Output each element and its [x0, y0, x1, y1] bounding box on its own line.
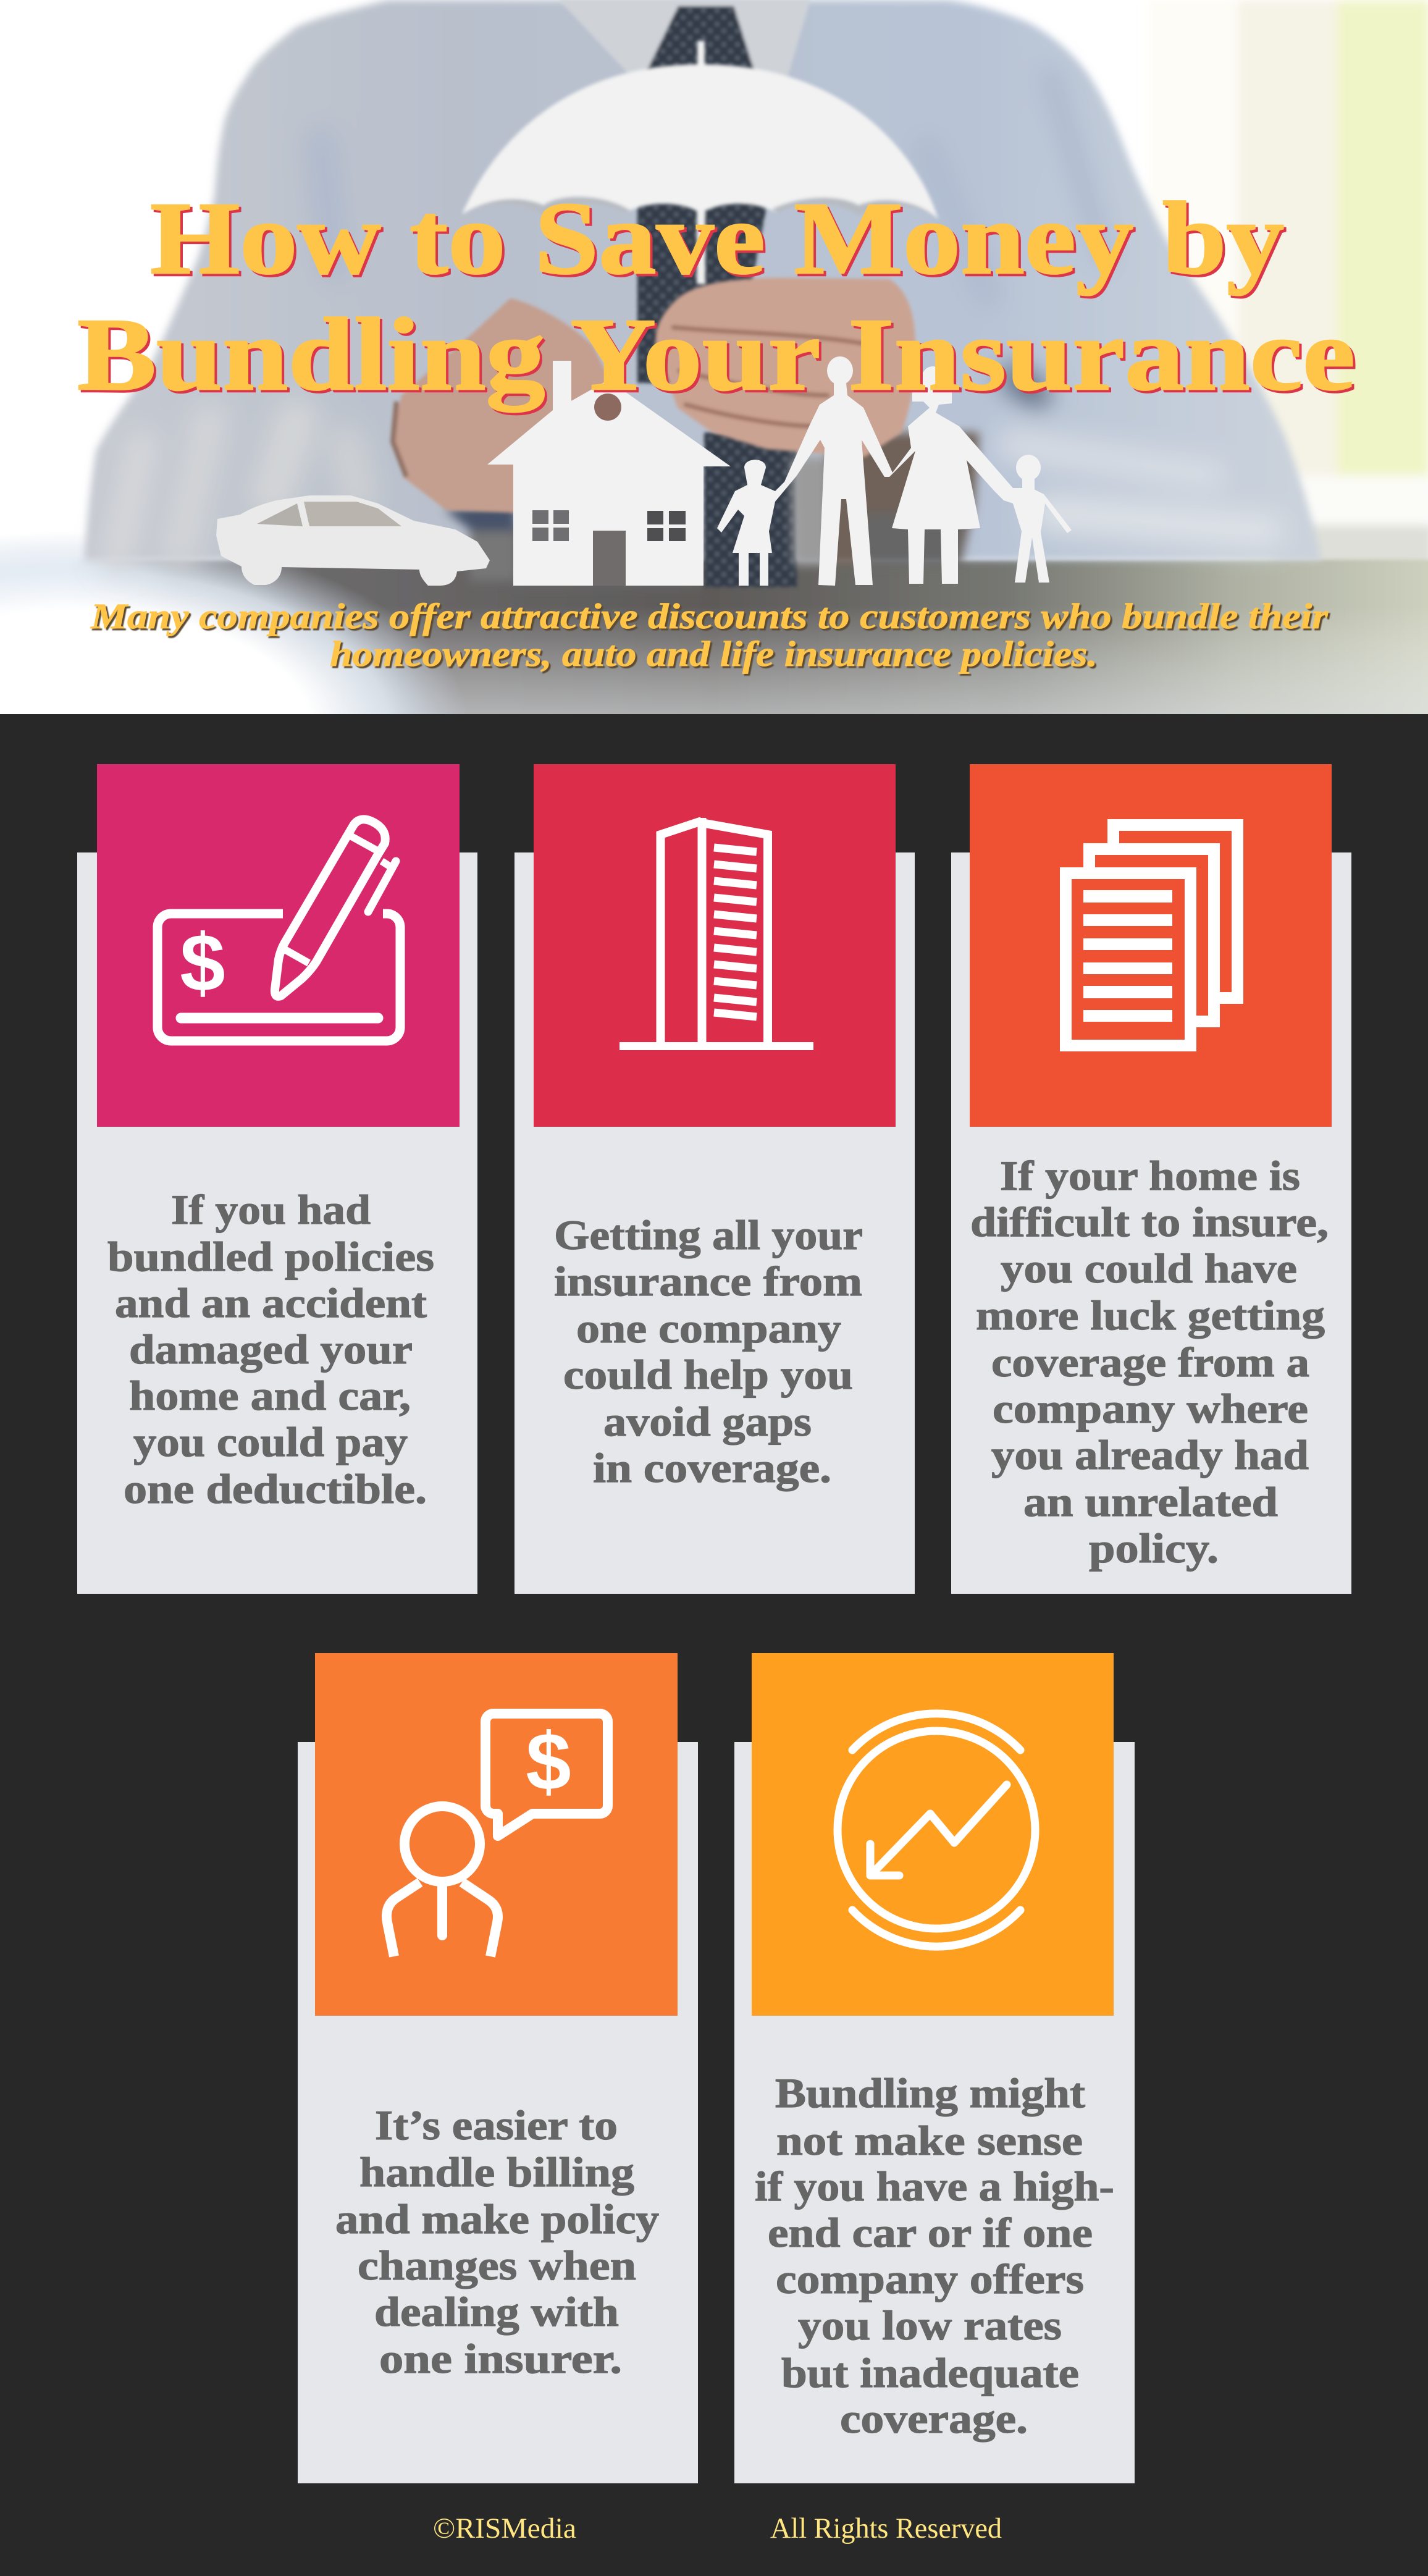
text: difficult home	[970, 1152, 1329, 1572]
title: How to Save Money by	[150, 181, 1284, 296]
text: difficult home: coverage from a	[991, 1339, 1309, 1386]
text: when bundling fails: Bundling might	[775, 2069, 1085, 2116]
shadows behind family	[445, 432, 979, 587]
panel: card 1 deductible	[77, 764, 477, 1594]
title: Bundling Your Insurance	[77, 297, 1355, 412]
text: difficult home: more luck getting	[976, 1292, 1325, 1339]
subtitle: Many companies offer attractive discounts to customers who bundle their	[90, 596, 1328, 636]
text: difficult home: you could have	[1001, 1245, 1297, 1292]
table	[0, 531, 1428, 927]
text: when bundling fails: company offers	[776, 2255, 1084, 2302]
text: deductible: and an accident	[115, 1279, 427, 1326]
text: billing: and make policy	[335, 2195, 659, 2242]
text: difficult home: company where	[993, 1385, 1308, 1432]
text: deductible	[107, 1186, 434, 1512]
subtitle: homeowners, auto and life insurance policies.	[330, 634, 1098, 674]
umbrella	[462, 41, 938, 284]
title	[77, 181, 1355, 412]
icon: circular chart arrow	[838, 1714, 1035, 1947]
icon: person with dollar speech bubble	[387, 1714, 608, 1956]
text: deductible: you could pay	[133, 1418, 408, 1465]
footer: copyright	[433, 2512, 1002, 2544]
text: difficult home: If your home is	[1000, 1152, 1300, 1199]
panel: card 4 billing	[298, 1653, 698, 2483]
panel: card 3 difficult home	[951, 764, 1351, 1594]
text: coverage gaps: Getting all your	[554, 1211, 863, 1258]
text: difficult home: you already had	[991, 1431, 1309, 1478]
text: when bundling fails	[755, 2069, 1114, 2442]
text: billing: one insurer.	[379, 2335, 622, 2382]
shirt	[84, 0, 1322, 560]
text: billing: changes when	[358, 2242, 636, 2289]
footer: copyright: ©RISMedia	[433, 2512, 576, 2544]
text: coverage gaps: one company	[576, 1305, 841, 1352]
icon: check and pen	[158, 819, 400, 1041]
text: coverage gaps: avoid gaps	[603, 1398, 812, 1445]
text: when bundling fails: you low rates	[798, 2302, 1062, 2349]
text: coverage gaps: in coverage.	[593, 1444, 831, 1491]
text: when bundling fails: coverage.	[840, 2395, 1028, 2442]
panel: card 2 coverage gaps	[514, 764, 915, 1594]
icon: stacked documents	[1066, 825, 1238, 1045]
text: billing: dealing with	[374, 2288, 619, 2335]
text: when bundling fails: but inadequate	[781, 2349, 1079, 2396]
paper family	[717, 356, 1072, 586]
text: difficult home: difficult to insure,	[970, 1198, 1329, 1245]
text: when bundling fails: if you have a high-	[755, 2163, 1114, 2210]
dark background	[0, 714, 1428, 2576]
paper car	[216, 495, 490, 586]
text: difficult home: an unrelated	[1023, 1478, 1278, 1525]
subtitle	[90, 596, 1328, 674]
text: billing: handle billing	[359, 2149, 634, 2195]
text: billing: It’s easier to	[375, 2102, 618, 2149]
text: coverage gaps: could help you	[563, 1351, 853, 1398]
text: when bundling fails: not make sense	[776, 2117, 1083, 2164]
icon: office building	[620, 818, 813, 1046]
panel: card 5 when bundling fails	[734, 1653, 1135, 2483]
collar and tie	[559, 0, 810, 587]
text: coverage gaps: insurance from	[554, 1258, 862, 1305]
text: deductible: one deductible.	[124, 1465, 427, 1512]
icon: person with dollar speech bubble: $	[526, 1716, 571, 1807]
text: deductible: home and car,	[129, 1372, 411, 1419]
hands	[392, 278, 915, 513]
text: billing	[335, 2102, 659, 2382]
text: deductible: bundled policies	[107, 1233, 434, 1280]
hero photo: man protecting paper house, car and family with umbrella	[0, 0, 1428, 927]
paper house	[487, 361, 731, 586]
text: coverage gaps	[554, 1211, 863, 1491]
text: when bundling fails: end car or if one	[768, 2209, 1093, 2256]
text: deductible: damaged your	[129, 1326, 413, 1373]
text: difficult home: policy.	[1089, 1525, 1219, 1572]
icon: check and pen: $	[180, 917, 225, 1008]
text: deductible: If you had	[171, 1186, 371, 1233]
footer: copyright: All Rights Reserved	[770, 2512, 1002, 2544]
